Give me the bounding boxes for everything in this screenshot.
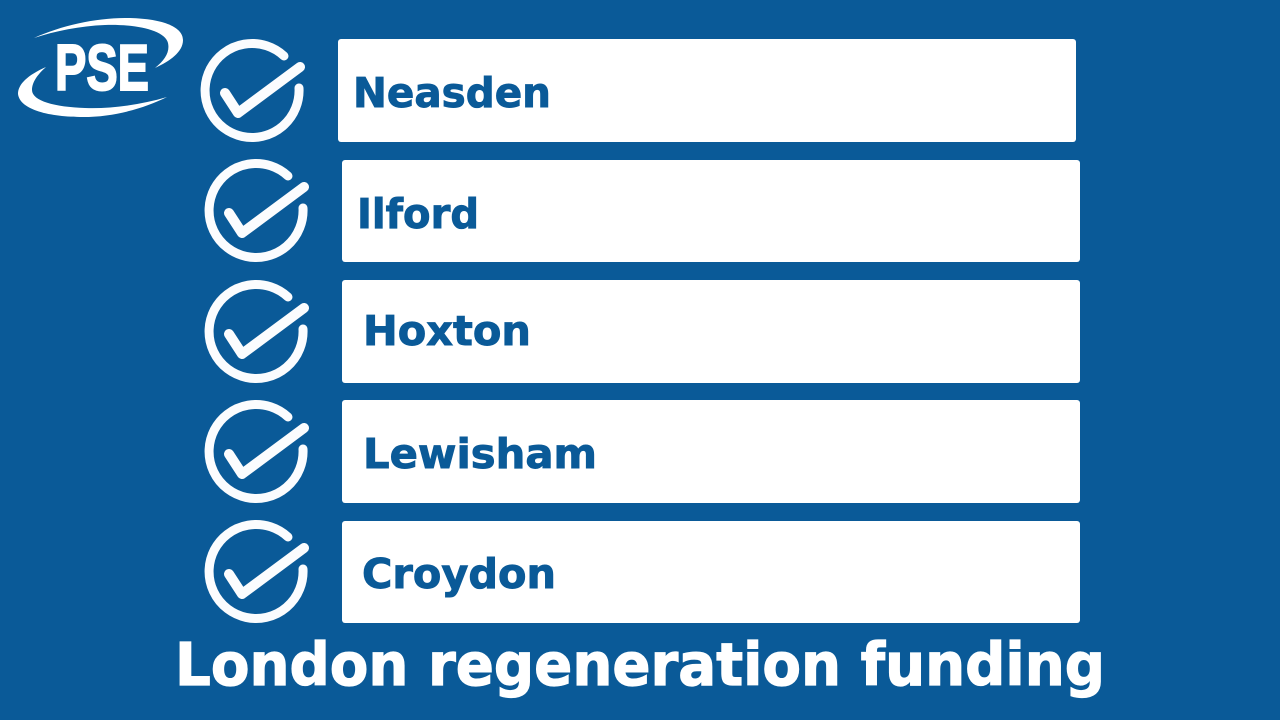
icon: check circle 5 xyxy=(209,524,304,618)
panel: Ilford: Ilford xyxy=(357,190,479,238)
panel: Ilford xyxy=(342,160,1080,262)
panel: Hoxton xyxy=(342,280,1080,383)
panel: Neasden xyxy=(338,39,1076,142)
panel: Croydon: Croydon xyxy=(362,550,556,598)
panel: Neasden: Neasden xyxy=(353,69,551,117)
panel: Lewisham xyxy=(342,400,1080,503)
icon: check circle 1 xyxy=(205,43,300,137)
logo: PSE xyxy=(18,18,183,117)
panel: Hoxton: Hoxton xyxy=(363,307,531,355)
icon: check circle 2 xyxy=(209,163,304,257)
icon: check circle 4 xyxy=(209,404,304,498)
panel: Lewisham: Lewisham xyxy=(363,430,597,478)
logo: PSE: PSE xyxy=(55,31,149,104)
icon: check circle 3 xyxy=(209,284,304,378)
title: London regeneration funding xyxy=(175,630,1105,699)
panel: Croydon xyxy=(342,521,1080,623)
